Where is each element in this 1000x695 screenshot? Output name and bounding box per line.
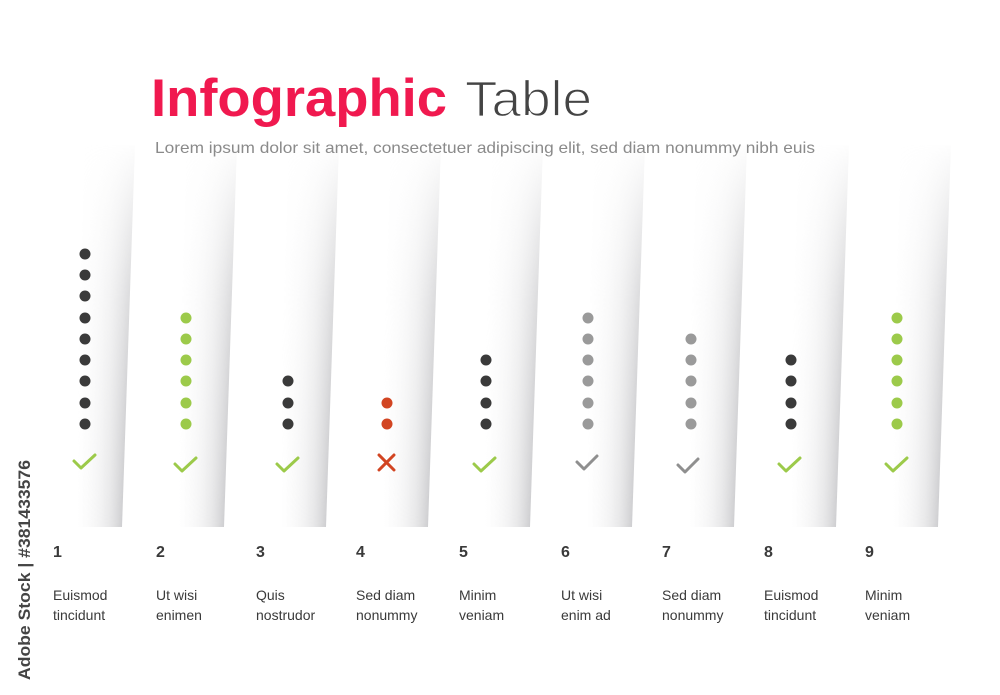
- column 9 dots: [892, 312, 902, 430]
- title: Table: [465, 71, 592, 127]
- column numbers: 7: [662, 544, 671, 561]
- column labels: veniam: [865, 607, 910, 623]
- side watermark text: Adobe Stock | #381433576: [15, 460, 34, 680]
- column labels: [53, 587, 910, 623]
- icon: check 6: [577, 456, 597, 469]
- icon: cross 4: [379, 455, 394, 470]
- title: Infographic: [151, 69, 447, 128]
- column labels: Quis: [256, 587, 285, 603]
- column labels: Sed diam: [662, 587, 721, 603]
- subtitle: Lorem ipsum dolor sit amet, consectetuer adipiscing elit, sed diam nonummy nibh euis: [155, 140, 815, 157]
- title: [151, 69, 592, 128]
- column 7 dots: [686, 334, 696, 430]
- column 1 dots: [80, 248, 90, 430]
- icon: check 3: [277, 458, 298, 471]
- column 6 dots: [582, 312, 594, 430]
- column labels: tincidunt: [764, 607, 816, 623]
- column labels: Ut wisi: [561, 587, 602, 603]
- column numbers: 6: [561, 544, 570, 561]
- column labels: nonummy: [356, 607, 417, 623]
- column 4 dots: [382, 398, 392, 430]
- status icons: [74, 455, 907, 472]
- column labels: nostrudor: [256, 607, 315, 623]
- column labels: enimen: [156, 607, 202, 623]
- column 8 dots: [786, 354, 796, 430]
- icon: check 1: [74, 455, 95, 468]
- column labels: Sed diam: [356, 587, 415, 603]
- column labels: veniam: [459, 607, 504, 623]
- column labels: Minim: [459, 587, 496, 603]
- icon: check 9: [886, 458, 907, 471]
- icon: check 5: [474, 458, 495, 471]
- column numbers: 1: [53, 544, 62, 561]
- column numbers: 9: [865, 544, 874, 561]
- icon: check 2: [175, 458, 196, 471]
- column numbers: [53, 544, 874, 561]
- column numbers: 5: [459, 544, 468, 561]
- column labels: nonummy: [662, 607, 723, 623]
- column numbers: 3: [256, 544, 265, 561]
- column 2 dots: [180, 312, 192, 430]
- column labels: enim ad: [561, 607, 611, 623]
- column numbers: 2: [156, 544, 165, 561]
- column numbers: 8: [764, 544, 773, 561]
- column labels: Euismod: [764, 587, 818, 603]
- column shadows: [72, 145, 951, 527]
- column 3 dots: [282, 376, 294, 430]
- column labels: Ut wisi: [156, 587, 197, 603]
- column 5 dots: [480, 354, 492, 430]
- column labels: Minim: [865, 587, 902, 603]
- column numbers: 4: [356, 544, 365, 561]
- column labels: tincidunt: [53, 607, 105, 623]
- icon: check 8: [779, 458, 800, 471]
- icon: check 7: [678, 459, 698, 472]
- column labels: Euismod: [53, 587, 107, 603]
